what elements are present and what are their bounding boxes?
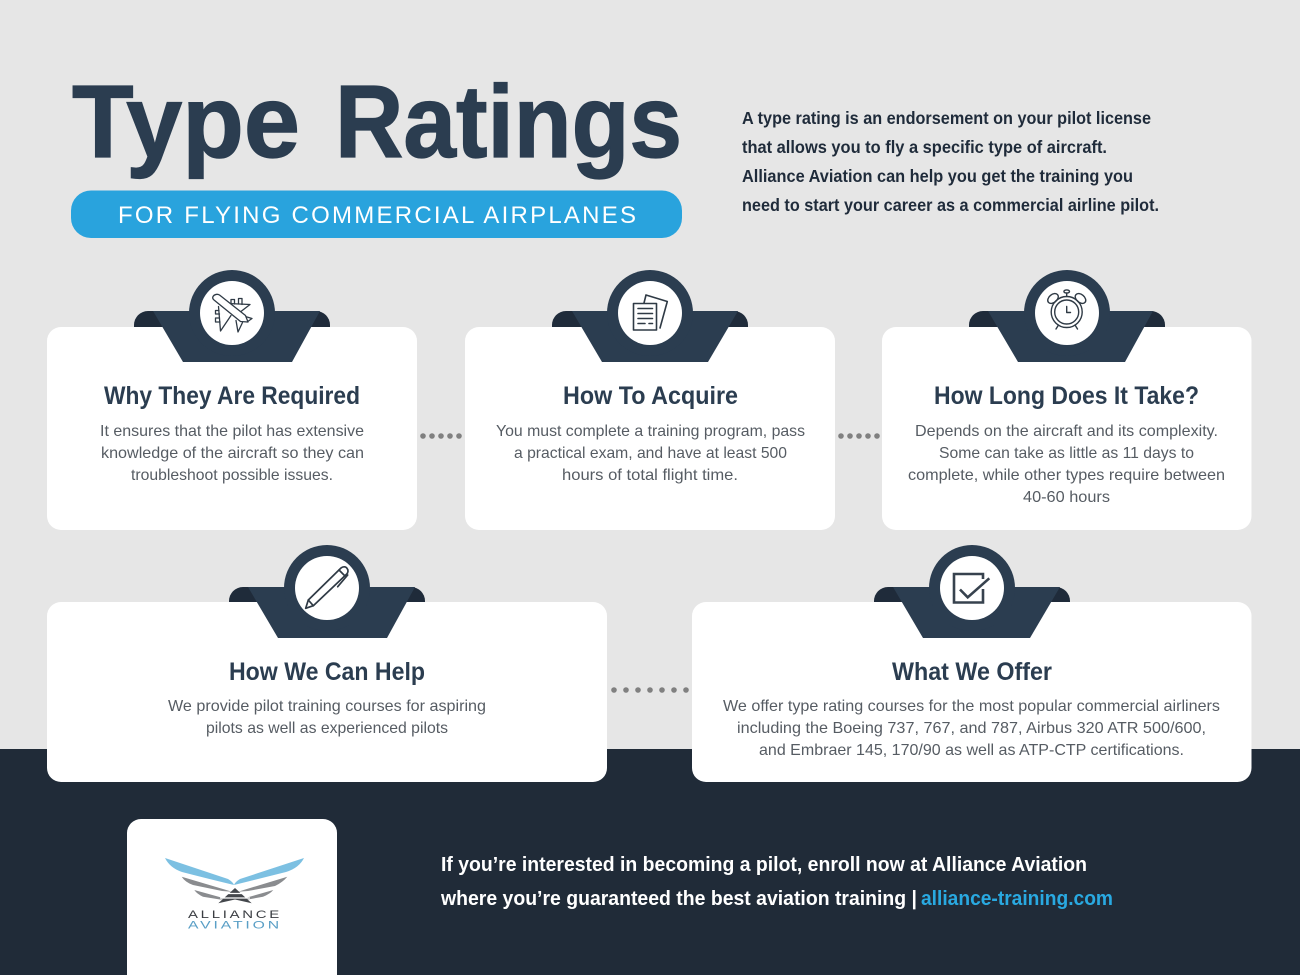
connector dots: second to third card	[838, 433, 880, 439]
icon: checkbox	[954, 574, 989, 602]
title	[72, 64, 682, 179]
panel: how long does it take: Some can take as little as 11 days to	[939, 445, 1194, 462]
panel: how to acquire: a practical exam, and have at least 500	[514, 445, 787, 462]
panel: how to acquire: How To Acquire	[563, 382, 738, 410]
panel: why they are required	[47, 270, 417, 530]
title: Ratings	[335, 64, 682, 179]
panel: what we offer: and Embraer 145, 170/90 as well as ATP-CTP certifications.	[759, 742, 1184, 759]
panel: why they are required: troubleshoot possible issues.	[131, 467, 333, 484]
panel: how long does it take: How Long Does It Take?	[934, 382, 1199, 410]
panel: how we can help: pilots as well as experienced pilots	[206, 720, 448, 737]
panel: how long does it take: 40-60 hours	[1023, 489, 1110, 506]
icon: pen	[306, 567, 348, 608]
intro text: that allows you to fly a specific type of aircraft.	[742, 137, 1107, 157]
call to action text: alliance-training.com	[921, 887, 1113, 910]
subtitle banner	[71, 190, 682, 238]
subtitle banner: FOR FLYING COMMERCIAL AIRPLANES	[118, 202, 636, 229]
panel: how to acquire: hours of total flight time.	[562, 467, 738, 484]
intro text: Alliance Aviation can help you get the training you	[742, 166, 1133, 186]
icon: airplane	[213, 294, 252, 332]
panel: what we offer	[692, 545, 1252, 782]
call to action text: where you’re guaranteed the best aviation training |	[440, 887, 917, 910]
logo card	[127, 819, 337, 975]
panel: how to acquire: You must complete a training program, pass	[496, 423, 805, 440]
call to action text: If you’re interested in becoming a pilot, enroll now at Alliance Aviation	[441, 853, 1087, 876]
connector dots: first to second card	[420, 433, 462, 439]
connector dots: fourth to fifth card	[611, 687, 689, 693]
panel: what we offer: including the Boeing 737, 767, and 787, Airbus 320 ATR 500/600,	[737, 720, 1206, 737]
panel: how we can help: We provide pilot training courses for aspiring	[168, 698, 486, 715]
icon: alarm clock	[1046, 290, 1088, 329]
logo card: AVIATION	[188, 920, 282, 932]
panel: how to acquire	[465, 270, 835, 530]
intro text	[742, 108, 1159, 215]
title: Type	[72, 64, 300, 179]
logo card: ALLIANCE	[188, 909, 282, 921]
intro text: A type rating is an endorsement on your pilot license	[742, 108, 1151, 128]
panel: what we offer: What We Offer	[892, 658, 1052, 686]
panel: how long does it take	[882, 270, 1252, 530]
logo: wings	[165, 858, 304, 903]
call to action text	[440, 853, 1113, 910]
intro text: need to start your career as a commercial airline pilot.	[742, 195, 1159, 215]
panel: why they are required: knowledge of the aircraft so they can	[101, 445, 364, 462]
panel: how we can help: How We Can Help	[229, 658, 425, 686]
panel: what we offer: We offer type rating courses for the most popular commercial airliners	[723, 698, 1220, 715]
panel: why they are required: It ensures that the pilot has extensive	[100, 423, 364, 440]
panel: how we can help	[47, 545, 607, 782]
icon: documents	[634, 295, 667, 330]
panel: why they are required: Why They Are Required	[104, 382, 360, 410]
panel: how long does it take: complete, while other types require between	[908, 467, 1225, 484]
panel: how long does it take: Depends on the aircraft and its complexity.	[915, 423, 1218, 440]
